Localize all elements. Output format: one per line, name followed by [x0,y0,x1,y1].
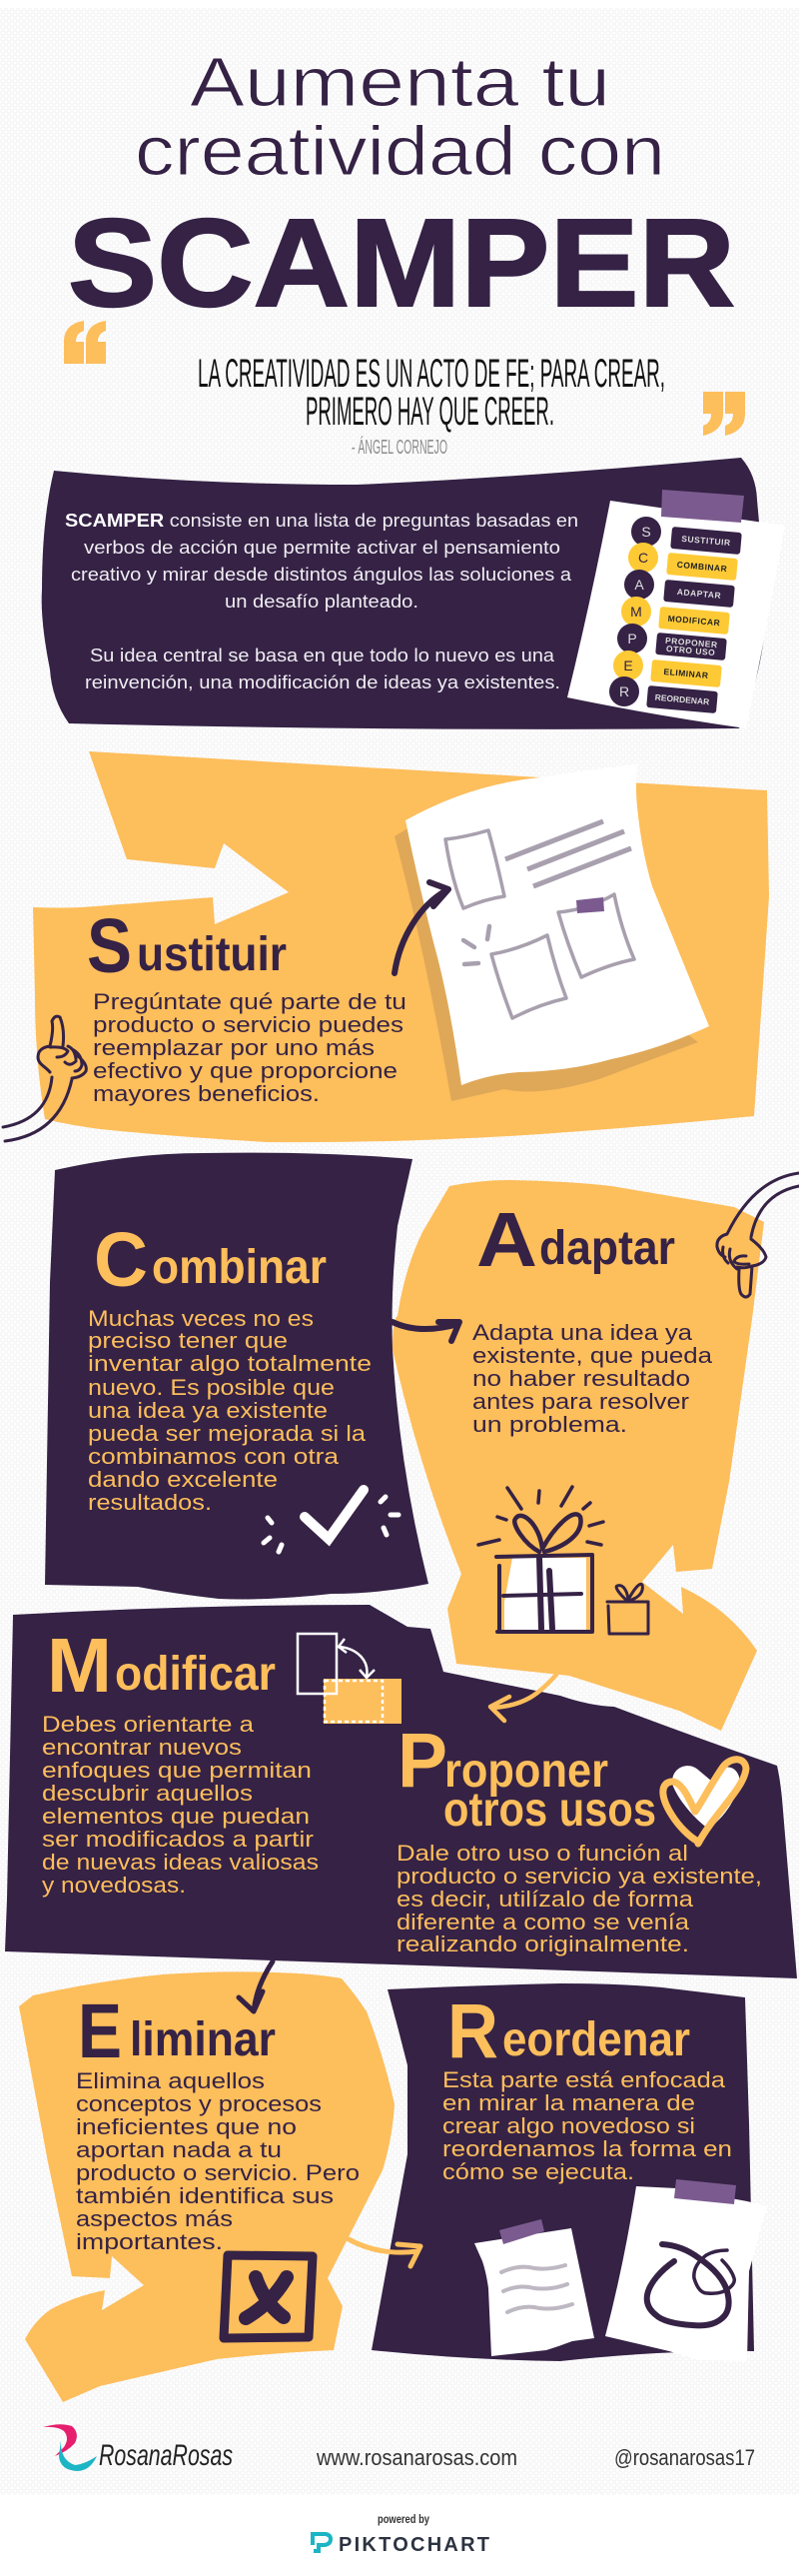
icon: modify shapes [298,1634,401,1724]
checklist rows: OTRO USO [666,644,716,657]
icon: opening quote [64,321,106,364]
text: Combinar [88,1306,372,1515]
text: Combinar: Muchas veces no es [88,1306,314,1331]
note: lined paper [474,2219,594,2356]
heading: Modificar [47,1623,276,1709]
icon: small gift [607,1584,648,1634]
text: Reordenar: Esta parte está enfocada [442,2067,726,2092]
checklist rows: S [641,524,651,540]
checklist rows: C [638,550,648,566]
heading: Sustituir: S [87,903,132,989]
footer logo [43,2424,233,2472]
text: Adaptar: no haber resultado [472,1366,690,1391]
arrow: Proponer to Eliminar [239,1961,273,2011]
quote text [198,352,665,459]
text: Adaptar [472,1320,713,1437]
icon: X box [224,2255,313,2338]
text: Modificar: enfoques que permitan [42,1758,312,1783]
panel: Sustituir [3,751,769,1142]
text: Modificar: ser modificados a partir [42,1827,315,1852]
powered by Piktochart: powered by [378,2512,429,2526]
checklist rows: ELIMINAR [663,666,709,680]
text: Modificar: encontrar nuevos [42,1735,242,1760]
text: Combinar: combinamos con otra [88,1444,340,1469]
icon: check mark [264,1490,399,1552]
text: Eliminar: conceptos y procesos [76,2091,322,2116]
intro text: reinvención, una modificación de ideas ya existentes. [85,672,560,692]
text: Sustituir [93,989,406,1106]
text: Modificar: Debes orientarte a [42,1712,255,1737]
text: Reordenar [442,2067,732,2184]
text: Eliminar: aspectos más [76,2206,233,2231]
text: Eliminar: producto o servicio. Pero [76,2160,360,2185]
checklist rows [609,517,742,713]
text: Modificar [42,1712,319,1898]
title: Aumenta tu [190,43,610,121]
panel: intro [42,458,785,729]
text: Eliminar: aportan nada a tu [76,2137,282,2162]
text: Modificar: de nuevas ideas valiosas [42,1850,319,1875]
tape [661,490,744,523]
heading: Proponer otros usos: roponer [444,1745,608,1798]
text: Combinar: nuevo. Es posible que [88,1375,335,1400]
heading: Eliminar: liminar [130,2013,276,2066]
text: Proponer: es decir, utilízalo de forma [397,1887,694,1912]
text: Combinar: dando excelente [88,1467,278,1492]
heading: Reordenar: eordenar [502,2013,690,2066]
text: Modificar: y novedosas. [42,1873,186,1898]
powered by Piktochart [0,2495,799,2576]
checklist rows: COMBINAR [676,560,728,574]
website: www.rosanarosas.com [316,2445,517,2470]
checklist rows: M [630,604,642,620]
social handle: @rosanarosas17 [614,2445,755,2470]
heading: Eliminar: E [78,1988,122,2074]
icon: large gift [478,1487,603,1632]
heading: Sustituir: ustituir [137,928,287,981]
heading: Adaptar: daptar [539,1222,675,1275]
checklist rows: E [623,657,633,673]
heading: Sustituir [87,903,287,989]
text: Proponer: realizando originalmente. [397,1932,689,1956]
checklist rows: R [619,683,629,699]
title: SCAMPER [68,194,735,333]
text: Sustituir: mayores beneficios. [93,1081,320,1106]
paper with sketches [405,764,709,1085]
text: Proponer: diferente a como se venía [397,1910,690,1934]
heading: Reordenar [447,1988,690,2074]
checklist rows: REORDENAR [654,692,710,706]
text: Modificar: descubrir aquellos [42,1781,253,1806]
heading: Proponer otros usos [398,1718,656,1837]
text: Eliminar: ineficientes que no [76,2114,297,2139]
text: Sustituir: producto o servicio puedes [93,1012,403,1037]
text: Sustituir: efectivo y que proporcione [93,1058,398,1083]
intro text: verbos de acción que permite activar el pensamiento [84,538,560,558]
panel: Eliminar [19,1971,395,2402]
text: Proponer: producto o servicio ya existente, [397,1864,762,1889]
icon: closing quote [703,392,745,436]
text: Adaptar: un problema. [472,1412,627,1437]
SCAMPER checklist note [567,490,785,728]
text: Eliminar [76,2068,360,2254]
checklist rows: SUSTITUIR [681,534,731,548]
icon: hand pointing down [717,1173,799,1297]
checklist rows: PROPONER [665,636,718,649]
text: Combinar: inventar algo totalmente [88,1351,372,1376]
panel: Reordenar [372,1983,767,2361]
title: creatividad con [135,112,665,190]
text: Proponer [397,1841,762,1956]
heading: Adaptar [476,1197,675,1283]
text: Reordenar: cómo se ejecuta. [442,2159,634,2184]
heading: Proponer otros usos: P [398,1718,447,1804]
text: Sustituir: reemplazar por uno más [93,1035,375,1060]
text: Combinar: preciso tener que [88,1328,288,1353]
arrow: Adaptar to Proponer [490,1675,556,1721]
heading: Proponer otros usos: otros usos [443,1784,656,1837]
text: Modificar: elementos que puedan [42,1804,310,1829]
intro text: un desafío planteado. [225,592,418,612]
checklist rows: MODIFICAR [667,614,721,628]
heading: Reordenar: R [447,1988,498,2074]
arrow: Eliminar to Reordenar [349,2239,420,2266]
heading: Combinar: C [94,1217,148,1303]
intro text [65,511,578,692]
text: Reordenar: crear algo novedoso si [442,2113,695,2138]
text: Eliminar: también identifica sus [76,2183,334,2208]
panel: Combinar [45,1153,428,1599]
heading: Modificar: M [47,1623,112,1709]
paper shadow [395,827,698,1101]
heading: Combinar: ombinar [152,1241,327,1294]
heading: Modificar: odificar [115,1648,276,1701]
icon: heart [663,1760,746,1844]
heading: Combinar [94,1217,327,1303]
text: Reordenar: en mirar la manera de [442,2090,695,2115]
text: Eliminar: importantes. [76,2229,223,2254]
text: Reordenar: reordenamos la forma en [442,2136,732,2161]
footer logo: RosanaRosas [99,2439,233,2472]
panel: Adaptar [393,1173,799,1731]
text: Combinar: una idea ya existente [88,1398,328,1423]
checklist rows: A [634,577,644,593]
title [68,43,735,333]
heading: Adaptar: A [476,1197,537,1283]
text: Sustituir: Pregúntate qué parte de tu [93,989,406,1014]
intro text: SCAMPER consiste en una lista de preguntas basadas en [65,511,578,531]
intro text: Su idea central se basa en que todo lo nuevo es una [90,645,555,665]
text: Combinar: resultados. [88,1490,212,1515]
arrow: to paper [395,882,448,973]
powered by Piktochart: PIKTOCHART [339,2534,489,2556]
text: Adaptar: existente, que pueda [472,1343,713,1368]
panel: Modificar and Proponer [5,1605,797,1978]
note: scribble paper [605,2179,767,2361]
intro text: creativo y mirar desde distintos ángulos las soluciones a [71,565,572,585]
text: Combinar: pueda ser mejorada si la [88,1421,367,1446]
checklist rows: P [627,631,637,646]
text: Adaptar: antes para resolver [472,1389,690,1414]
text: Adaptar: Adapta una idea ya [472,1320,693,1345]
arrow: Combinar to Adaptar [393,1322,459,1341]
icon: hand pointing up [3,1016,86,1141]
heading: Eliminar [78,1988,276,2074]
text: Eliminar: Elimina aquellos [76,2068,265,2093]
text: Proponer: Dale otro uso o función al [397,1841,688,1866]
checklist rows: ADAPTAR [676,587,722,601]
quote text: - ÁNGEL CORNEJO [352,436,447,459]
